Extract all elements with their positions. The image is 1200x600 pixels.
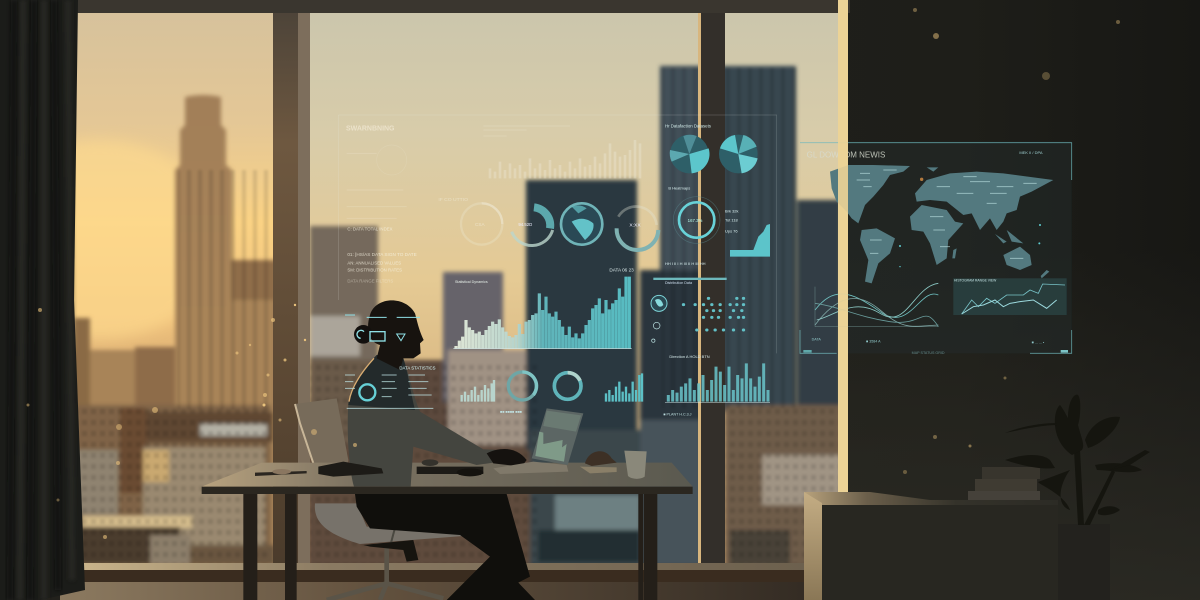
panel frame corners: [800, 143, 1072, 353]
main bar chart: DATA 06 23: [609, 267, 634, 272]
ring gauge three: X:XX: [629, 223, 641, 229]
panel background: [848, 142, 1072, 353]
bright window edge over panel: [838, 0, 848, 495]
global news wall panel: [800, 142, 1072, 355]
dashboard panel frame: [338, 115, 777, 353]
desk items left: [255, 462, 383, 477]
label row: Hr Datafaction Datasets: [665, 123, 711, 128]
world map: [830, 165, 1053, 283]
chair: [295, 398, 467, 600]
area chart: [730, 224, 770, 257]
mini pie: [651, 295, 667, 311]
dashboard heading: SWARNBNING: [346, 126, 395, 133]
torso: [348, 355, 500, 487]
coffee cup: [624, 451, 647, 479]
window panes with sunset sky: [0, 10, 842, 570]
progress bar heading: Distribution Data: [665, 281, 693, 285]
small readings: Brk 32k: [725, 209, 739, 214]
wave line chart: [815, 283, 938, 327]
small readings: B Heatmaps: [668, 185, 690, 190]
stacked books: [968, 467, 1040, 500]
side cabinet: [804, 492, 1058, 600]
legs: [355, 494, 535, 600]
computer mouse and pad: [580, 451, 617, 473]
dot matrix: [683, 298, 744, 330]
footer controls: [803, 338, 1068, 355]
legend top right: MEK II / DPA: [1019, 150, 1043, 155]
data text block: [347, 227, 417, 284]
right bar chart: Direction A HOLD BTN: [669, 354, 710, 359]
main bar chart: Statistical Dynamics: [455, 280, 488, 284]
headset UI overlay: [345, 315, 420, 341]
main bar chart: [453, 267, 634, 349]
desk scene: [202, 300, 693, 600]
radial gauge: [673, 197, 720, 243]
footer controls: ■ 3584 A: [866, 340, 881, 344]
curtain: [0, 0, 85, 600]
data text block: SM: DISTRIBUTION RATES: [347, 268, 402, 273]
right bar chart: [665, 354, 770, 402]
footer text: ■ PLANT H.C.3.J: [663, 412, 692, 416]
torso gauge: [359, 384, 375, 400]
ring gauge two: 94.52D: [518, 222, 532, 227]
building window texture: [76, 68, 841, 565]
ring gauge two: [512, 207, 553, 246]
trend chart: HISTOGRAM RANGE VIEW: [954, 278, 997, 282]
ghost ring: [377, 145, 407, 175]
radial gauge: 167.3%: [688, 218, 702, 223]
map hot points: [899, 178, 1041, 267]
hand: [487, 449, 527, 467]
data text block: C: DATA TOTAL INDEX: [347, 227, 393, 232]
data text block: 01: [HS/AS DATA SIGN TO DATE: [347, 252, 417, 257]
progress bar heading: [653, 278, 727, 285]
map speckle: [857, 170, 1037, 258]
footer controls: DATA: [812, 338, 821, 342]
person upper body: [345, 300, 527, 487]
footer controls: MAP STATUS GRID: [912, 351, 945, 355]
small readings: HH I II I H III II H III HH: [665, 261, 706, 266]
head: [368, 300, 424, 370]
holographic dashboard on glass: [338, 115, 777, 416]
torso readouts: [345, 375, 433, 408]
ghost text lines: [347, 126, 570, 218]
footer text: [500, 410, 692, 416]
panel title: GL DOWBOM NEWIS: [807, 150, 885, 159]
small bar chart left: [462, 380, 494, 402]
footer controls: ■ ... ... ▪: [1032, 340, 1044, 344]
small readings: Tot 118: [725, 218, 739, 223]
side icons: [652, 322, 660, 342]
status text: IF CO UTTIO: [438, 197, 468, 203]
blurred city skyline: [72, 66, 841, 570]
notebook and mouse: [417, 459, 483, 476]
donut gauges: [508, 372, 581, 400]
ghost column chart: [490, 140, 640, 178]
trend chart: [953, 278, 1067, 315]
laptop: [493, 408, 583, 474]
footer text: ■■ ■■■■ ■■■: [500, 410, 522, 414]
small readings: Ups 76: [725, 228, 738, 233]
pie charts: [670, 135, 758, 173]
ring gauge three: [617, 207, 658, 250]
small bar chart right: [606, 373, 642, 402]
ring gauge one: CSA: [475, 222, 485, 227]
globe gauge: [561, 203, 602, 245]
potted plant: [1005, 395, 1150, 600]
window mullions and frame: [0, 0, 850, 600]
table: [202, 463, 693, 600]
small readings: [665, 185, 739, 266]
data text block: AN: ANNUALISED VALUES: [347, 260, 401, 265]
data text block: DATA RANGE FILTERS: [347, 279, 393, 284]
torso caption: DATA STATISTICS: [399, 365, 436, 370]
ring gauge one: [461, 203, 502, 245]
